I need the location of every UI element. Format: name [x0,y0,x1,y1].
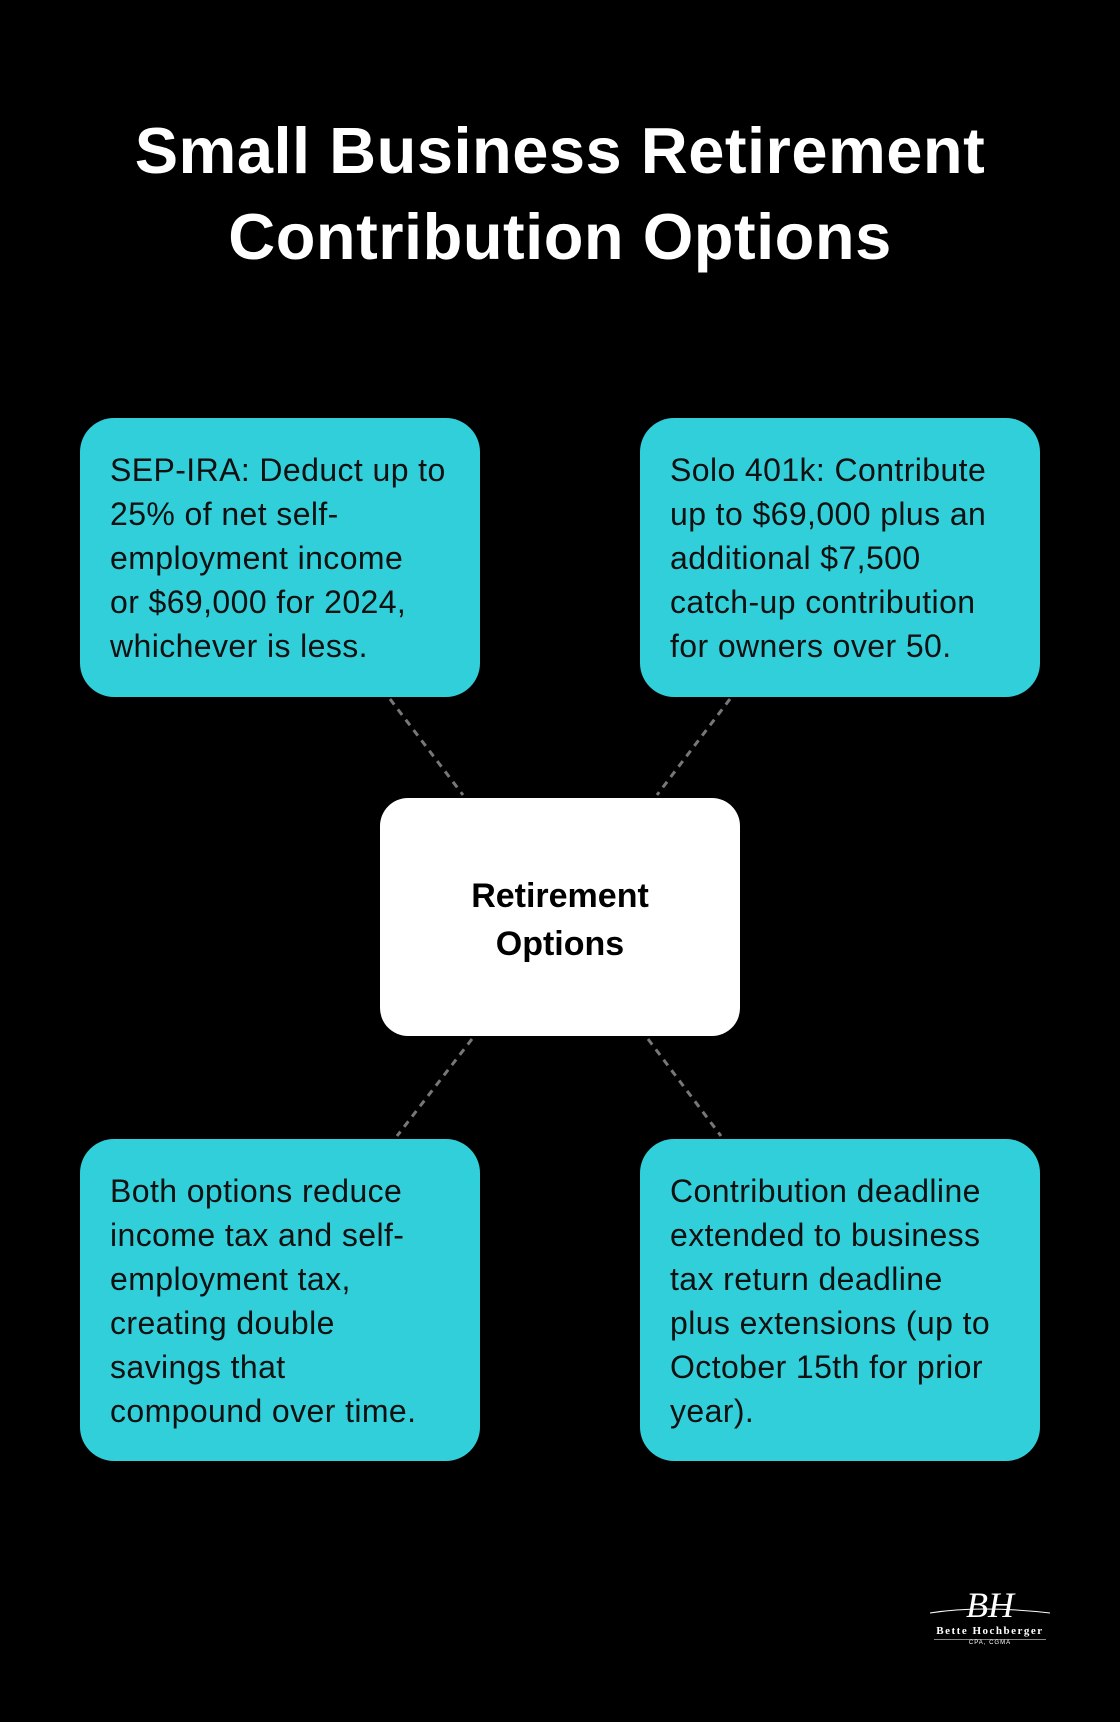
panel: SEP-IRA [80,418,480,697]
title: Small Business Retirement [135,114,985,187]
panel: deadline [640,1139,1040,1461]
panel: tax savings [80,1139,480,1461]
logo [930,1585,1050,1646]
panel: deadline: Contribution deadline extended to business tax return deadline plus extensions (up to October 15th for prior year). [670,1173,990,1429]
panel: SEP-IRA: or $69,000 for 2024, whichever is less. [110,584,406,664]
logo: BH [966,1585,1014,1625]
logo: CPA, CGMA [969,1640,1011,1646]
center node: Options [496,925,624,963]
title [135,114,985,273]
center node [380,798,740,1036]
title: Contribution Options [228,200,892,273]
center node: Retirement [471,877,649,915]
panel: Solo 401k [640,418,1040,697]
panel: Solo 401k: Solo 401k: Contribute up to $69,000 plus an additional $7,500 catch-up contribution for owners over 50. [670,452,986,664]
panel: tax savings: Both options reduce income tax and self-employment tax, creating double savings that compound over time. [110,1173,416,1429]
panel: SEP-IRA: SEP-IRA: Deduct up to 25% of net self-employment income [110,452,446,576]
logo: Bette Hochberger [936,1625,1044,1637]
